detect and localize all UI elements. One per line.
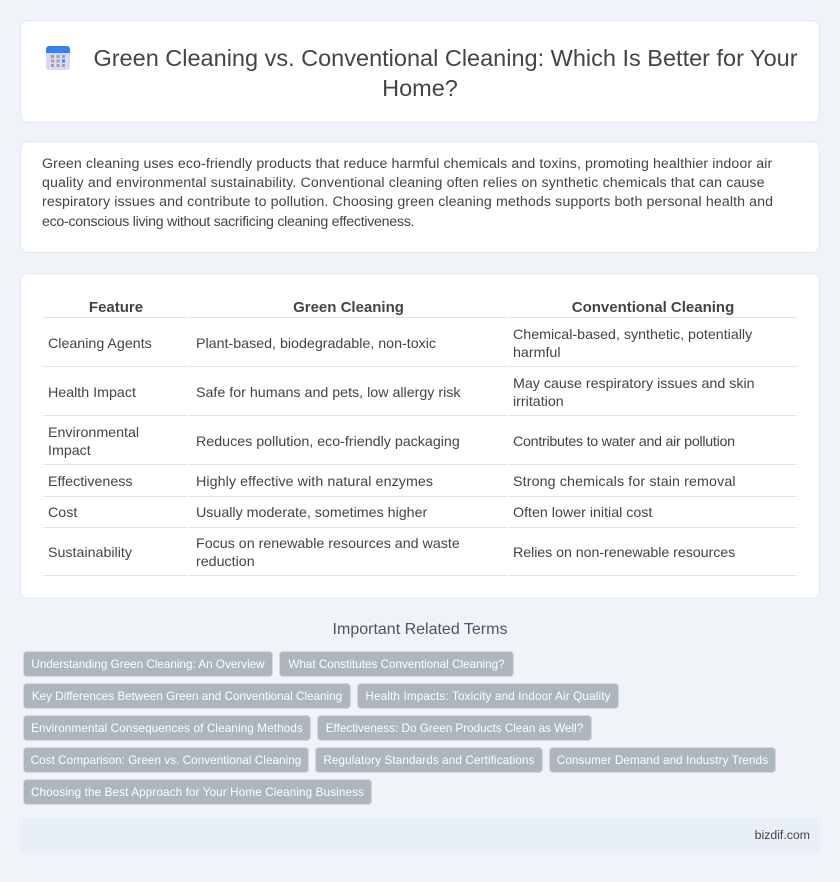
row: environmental impact: Reduces pollution, eco-friendly packaging	[196, 434, 460, 450]
row: health impact	[48, 376, 755, 410]
comparison table panel	[20, 273, 820, 599]
tag: Cost Comparison: Green vs. Conventional Cleaning	[31, 754, 301, 767]
tag: Regulatory Standards and Certifications	[323, 754, 535, 767]
intro paragraph	[42, 156, 773, 230]
row: health impact: May cause respiratory issues and skin	[513, 376, 755, 392]
row: environmental impact	[48, 425, 735, 459]
title: Green Cleaning vs. Conventional Cleaning: Which Is Better for Your	[93, 45, 798, 71]
tag	[24, 684, 350, 708]
tag	[280, 652, 513, 676]
related term tags	[23, 651, 776, 805]
row: effectiveness: Effectiveness	[48, 474, 132, 490]
tag	[358, 684, 618, 708]
tag	[24, 652, 272, 676]
title	[93, 45, 798, 101]
row: cleaning agents: Plant-based, biodegradable, non-toxic	[196, 336, 436, 352]
row: effectiveness: Highly effective with natural enzymes	[196, 474, 433, 490]
tag: Choosing the Best Approach for Your Home Cleaning Business	[31, 786, 364, 799]
intro paragraph: eco-conscious living without sacrificing cleaning effectiveness.	[42, 214, 414, 230]
column headers	[89, 299, 734, 316]
tag	[24, 748, 308, 772]
tag: Environmental Consequences of Cleaning Methods	[31, 722, 303, 735]
row: health impact: Health Impact	[48, 385, 136, 401]
tag: Consumer Demand and Industry Trends	[557, 754, 768, 767]
row: sustainability: Sustainability	[48, 545, 132, 561]
tag: What Constitutes Conventional Cleaning?	[288, 658, 505, 671]
row: cost: Often lower initial cost	[513, 505, 652, 521]
tag	[24, 780, 371, 804]
tag	[24, 716, 310, 740]
column headers: Green Cleaning	[293, 299, 404, 316]
row: effectiveness	[48, 474, 736, 490]
row: cleaning agents	[48, 327, 752, 361]
column headers: Feature	[89, 299, 143, 316]
intro paragraph: respiratory issues and contribute to pollution. Choosing green cleaning methods supports both personal health and	[42, 194, 773, 210]
column headers: Conventional Cleaning	[572, 299, 734, 316]
intro text panel	[20, 141, 820, 253]
row: cost: Usually moderate, sometimes higher	[196, 505, 427, 521]
footer bar	[20, 818, 820, 852]
row: cleaning agents: harmful	[513, 345, 561, 361]
footer source: bizdif.com	[755, 828, 810, 842]
row: sustainability: Focus on renewable resources and waste	[196, 536, 460, 552]
row: cost	[48, 505, 652, 521]
tag	[550, 748, 775, 772]
tag: Health Impacts: Toxicity and Indoor Air Quality	[365, 690, 611, 703]
row: cleaning agents: Cleaning Agents	[48, 336, 152, 352]
row: sustainability	[48, 536, 735, 570]
related terms heading: Important Related Terms	[333, 621, 507, 638]
tag	[318, 716, 591, 740]
header card	[20, 20, 820, 123]
row: effectiveness: Strong chemicals for stain removal	[513, 474, 736, 490]
tag: Understanding Green Cleaning: An Overview	[31, 658, 265, 671]
icon: calendar grid	[46, 46, 70, 70]
intro paragraph: quality and environmental sustainability. Conventional cleaning often relies on synthetic chemicals that can cause	[42, 175, 765, 191]
row: cleaning agents: Chemical-based, synthetic, potentially	[513, 327, 752, 343]
row: cost: Cost	[48, 505, 77, 521]
row: sustainability: Relies on non-renewable resources	[513, 545, 735, 561]
intro paragraph: Green cleaning uses eco-friendly products that reduce harmful chemicals and toxins, promoting healthier indoor air	[42, 156, 772, 172]
row: sustainability: reduction	[196, 554, 255, 570]
row: environmental impact: Contributes to water and air pollution	[513, 434, 735, 450]
tag	[316, 748, 542, 772]
row: environmental impact: Impact	[48, 443, 91, 459]
title: Home?	[382, 75, 458, 101]
row: health impact: Safe for humans and pets, low allergy risk	[196, 385, 461, 401]
tag: Key Differences Between Green and Conventional Cleaning	[32, 690, 342, 703]
row: health impact: irritation	[513, 394, 564, 410]
tag: Effectiveness: Do Green Products Clean as Well?	[326, 722, 583, 735]
row: environmental impact: Environmental	[48, 425, 139, 441]
